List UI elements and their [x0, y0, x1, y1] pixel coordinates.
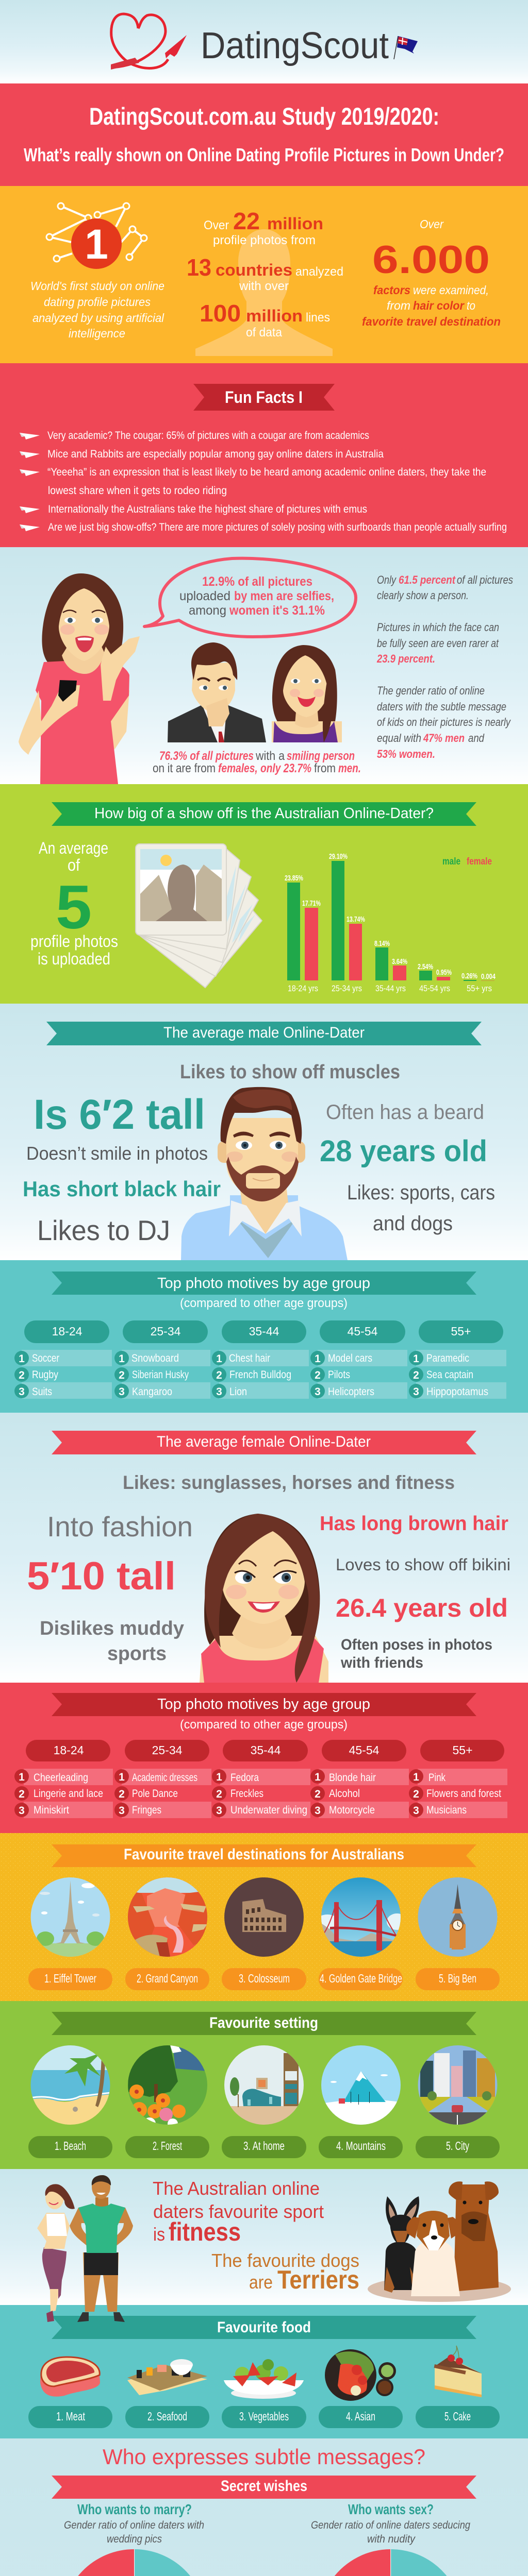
text: world's first study: intelligence: [69, 327, 125, 340]
text: picture statistics: 47% men: [423, 732, 465, 744]
text: picture statistics: The gender ratio of online: [377, 684, 485, 697]
speech bubble: 12.9% of all pictures: [202, 574, 312, 589]
table: female ranked motives: Blonde hair: [329, 1772, 376, 1784]
table: female ranked motives: Academic dresses: [132, 1772, 197, 1784]
ribbon heading: show off: [52, 802, 476, 826]
table: male ranked motives: Model cars: [328, 1352, 372, 1364]
text: female traits: Often poses in photos: [341, 1636, 492, 1653]
panel: average female online dater: [0, 1413, 528, 1683]
icon: DatingScout heart and paper plane: [111, 14, 187, 70]
text: factors examined: Over: [420, 217, 444, 231]
text: average five photos: profile photos: [30, 932, 118, 951]
ribbon heading: top motives male: [52, 1272, 476, 1295]
list: fun facts I: lowest share when it gets to rodeo riding: [48, 485, 227, 497]
illustration: woman with phone: [19, 573, 140, 784]
text: male traits: Likes to show off muscles: [180, 1061, 400, 1083]
destination labels: 1. Eiffel Tower: [44, 1972, 96, 1985]
bar chart: photos by age and gender: 13.74%: [346, 915, 365, 924]
table: male ranked motives: 2: [413, 1369, 419, 1381]
list: fun facts I: [20, 430, 507, 533]
table: female ranked motives: 3: [413, 1805, 419, 1817]
text: who wants sex: with nudity: [367, 2533, 416, 2545]
text: male traits: Doesn’t smile in photos: [26, 1143, 208, 1164]
bar chart: photos by age and gender: female: [467, 856, 492, 867]
icon: Big Ben: [418, 1877, 497, 1957]
ribbon heading: top motives female: Top photo motives by age group: [157, 1696, 370, 1713]
setting labels: 5. City: [446, 2139, 469, 2153]
table: male ranked motives: 2: [119, 1369, 125, 1381]
ribbon heading: average female: [52, 1431, 476, 1454]
table: male ranked motives: 1: [413, 1353, 419, 1365]
text: male traits: 28 years old: [320, 1134, 487, 1168]
bar chart: photos by age and gender: male: [442, 856, 460, 867]
destination labels: 2. Grand Canyon: [137, 1972, 198, 1985]
ribbon heading: Fun Facts I: [193, 384, 335, 411]
text: male traits: Likes: sports, cars: [347, 1181, 495, 1204]
text: female traits: Has long brown hair: [320, 1513, 508, 1535]
text: who wants sex: Gender ratio of online daters seducing: [311, 2519, 470, 2531]
table: female ranked motives: Cheerleading: [34, 1772, 88, 1784]
text: average five photos: An average: [39, 839, 108, 857]
speech bubble: women it's 31.1%: [229, 603, 325, 618]
table: female ranked motives: 1: [119, 1771, 125, 1783]
table: female ranked motives: 2: [19, 1788, 25, 1800]
subheading: (compared to other age groups): [180, 1296, 348, 1310]
text: favourite sport: [153, 2178, 324, 2246]
table: female ranked motives: Musicians: [426, 1804, 467, 1816]
list: fun facts I: “Yeeeha” is an expression that is least likely to be heard among academic online daters, they take the: [47, 466, 486, 478]
icon: sushi: [127, 2359, 207, 2395]
text: favourite dogs: [211, 2250, 359, 2294]
text: female traits: sports: [107, 1643, 167, 1665]
bar chart: photos by age and gender: 2.54%: [418, 962, 433, 971]
table: female ranked motives: Flowers and forest: [426, 1788, 501, 1800]
table: male ranked motives: Rugby: [32, 1369, 58, 1381]
panel: study key figures: [0, 186, 528, 363]
text: world's first study: World's first study on online: [30, 279, 164, 293]
table: female ranked motives: 3: [119, 1805, 125, 1817]
table: male ranked motives: 1: [315, 1353, 321, 1365]
table: male ranked motives: Lion: [229, 1386, 247, 1398]
ribbon heading: Fun Facts I: Fun Facts I: [225, 388, 303, 406]
table: male ranked motives: 1: [119, 1353, 125, 1365]
text: world's first study: [30, 279, 164, 340]
table: male ranked motives: Soccer: [32, 1352, 59, 1364]
text: data volume: million: [246, 307, 303, 325]
illustration: smiling woman: [272, 645, 342, 742]
table: male ranked motives: Suits: [32, 1386, 52, 1398]
text: data volume: 100: [200, 300, 241, 327]
bar chart: photos by age and gender: 55+ yrs: [467, 984, 492, 993]
text: data volume: [187, 208, 343, 340]
ribbon heading: travel: [52, 1844, 476, 1867]
text: data volume: profile photos from: [213, 233, 316, 247]
text: favourite sport: fitness: [169, 2217, 241, 2246]
age pills: 18-24: [52, 1325, 82, 1338]
donut chart: wedding pics: [62, 2549, 206, 2576]
panel: fun facts I: [0, 363, 528, 547]
table: female ranked motives: 2: [119, 1788, 125, 1800]
destination labels: 3. Colosseum: [239, 1972, 290, 1985]
caption: smiling statistics: [153, 749, 361, 775]
list: fun facts I: Internationally the Australians take the highest share of pictures with emus: [48, 503, 367, 515]
table: male ranked motives: 2: [19, 1369, 25, 1381]
logo wordmark: DatingScout: [201, 25, 389, 66]
food labels: 4. Asian: [346, 2410, 375, 2423]
setting labels: 4. Mountains: [336, 2139, 386, 2153]
text: average five photos: of: [68, 856, 80, 874]
text: favourite dogs: The favourite dogs: [211, 2250, 359, 2271]
bar chart: photos by age and gender: 8.14%: [374, 939, 390, 948]
icon: beach: [30, 2045, 111, 2125]
ribbon heading: food: [52, 2316, 476, 2339]
table: male ranked motives: 2: [216, 1369, 222, 1381]
text: picture statistics: clearly show a person.: [377, 589, 469, 602]
bar chart: photos by age and gender: 0.95%: [436, 968, 452, 977]
table: male ranked motives: 1: [216, 1353, 222, 1365]
text: picture statistics: of all pictures: [457, 573, 513, 586]
age pills: 45-54: [348, 1325, 378, 1338]
caption: smiling statistics: from: [314, 761, 336, 775]
destination labels: 5. Big Ben: [439, 1972, 476, 1985]
table: female ranked motives: Fedora: [230, 1772, 259, 1784]
table: female ranked motives: [14, 1769, 507, 1818]
table: male ranked motives: Helicopters: [328, 1386, 374, 1398]
illustration: three terriers: [368, 2181, 511, 2302]
table: female ranked motives: Pink: [428, 1772, 446, 1784]
age pills: 18-24: [54, 1743, 84, 1757]
table: male ranked motives: 3: [119, 1386, 125, 1398]
caption: smiling statistics: on it are from: [153, 761, 216, 775]
icon: Eiffel Tower: [30, 1877, 111, 1959]
table: male ranked motives: Hippopotamus: [426, 1386, 488, 1398]
age pills: [24, 1320, 503, 1343]
bar chart: photos by age and gender: 18-24 yrs: [288, 984, 318, 993]
panel: favourite setting: [0, 2001, 528, 2169]
table: male ranked motives: 2: [315, 1369, 321, 1381]
panel: average male online dater: [0, 1004, 528, 1260]
table: female ranked motives: Lingerie and lace: [34, 1788, 103, 1800]
panel: male photo motives: [0, 1260, 528, 1413]
text: female traits: Into fashion: [47, 1511, 193, 1543]
icon: city: [418, 2045, 498, 2125]
text: factors examined: were examined,: [413, 283, 489, 297]
text: average five photos: 5: [56, 873, 92, 942]
text: female traits: Loves to show off bikini: [336, 1555, 510, 1574]
bar chart: photos by age and gender: 23.85%: [285, 874, 303, 883]
text: picture statistics: Pictures in which the face can: [377, 621, 499, 634]
table: male ranked motives: French Bulldog: [229, 1369, 291, 1381]
text: factors examined: [362, 217, 501, 328]
text: average five photos: [30, 839, 118, 968]
table: female ranked motives: Alcohol: [329, 1788, 360, 1800]
food labels: 1. Meat: [56, 2410, 85, 2423]
ribbon heading: top motives female: [52, 1693, 476, 1716]
age pills: 25-34: [151, 1325, 181, 1338]
text: factors examined: factors: [373, 283, 410, 297]
caption: smiling statistics: females, only 23.7%: [218, 761, 311, 775]
setting labels: 2. Forest: [153, 2139, 182, 2153]
bar chart: photos by age and gender: 17.71%: [302, 899, 321, 908]
text: world's first study: dating profile pictures: [44, 295, 151, 309]
bar chart: photos by age and gender: 0.26%: [461, 972, 477, 980]
text: male traits: Likes to DJ: [37, 1214, 170, 1246]
text: world's first study: analyzed by using artificial: [32, 311, 164, 325]
text: picture statistics: [376, 573, 513, 760]
text: female traits: 5′10 tall: [27, 1554, 176, 1598]
icon: cake: [434, 2346, 482, 2397]
table: male ranked motives: Pilots: [328, 1369, 350, 1381]
age pills: [26, 1740, 504, 1761]
text: picture statistics: 53% women.: [377, 748, 435, 760]
bar chart: photos by age and gender: [285, 852, 496, 993]
age pills: 35-44: [249, 1325, 279, 1338]
text: picture statistics: and: [468, 732, 485, 744]
text: favourite sport: The Australian online: [153, 2178, 320, 2199]
icon: mountains: [321, 2045, 401, 2125]
panel: who expresses subtle messages: [0, 2438, 528, 2576]
table: male ranked motives: [14, 1350, 506, 1399]
text: picture statistics: 61.5 percent: [399, 573, 456, 586]
text: factors examined: to: [467, 299, 475, 312]
ribbon heading: setting: [52, 2012, 476, 2035]
panel: favourite sport and dogs: [0, 2169, 528, 2305]
text: picture statistics: Only: [377, 573, 397, 586]
ribbon heading: average male: [46, 1022, 482, 1045]
table: male ranked motives: Siberian Husky: [132, 1369, 189, 1381]
donut chart: nudity: [319, 2549, 463, 2576]
panel: selfies and smiles: [0, 547, 528, 784]
ribbon heading: secret wishes: Secret wishes: [221, 2478, 307, 2495]
list: fun facts I: Mice and Rabbits are especially popular among gay online daters in Australia: [47, 448, 384, 460]
icon: number one network: [46, 203, 147, 269]
text: who wants to marry: Who wants to marry?: [77, 2501, 192, 2517]
age pills: 25-34: [152, 1743, 183, 1757]
panel: favourite travel destinations: [0, 1833, 528, 2001]
table: female ranked motives: 3: [315, 1805, 321, 1817]
setting labels: [28, 2136, 500, 2158]
table: female ranked motives: 2: [413, 1788, 419, 1800]
illustration: jogging couple: [37, 2175, 133, 2322]
table: male ranked motives: Snowboard: [131, 1352, 179, 1364]
text: male traits: and dogs: [373, 1212, 453, 1235]
table: male ranked motives: 3: [315, 1386, 321, 1398]
list: fun facts I: Very academic? The cougar: 65% of pictures with a cougar are from academics: [47, 430, 369, 442]
text: female traits: 26.4 years old: [336, 1594, 508, 1622]
table: male ranked motives: 3: [413, 1386, 419, 1398]
subheading: (compared to other age groups): [180, 1718, 348, 1732]
text: factors examined: favorite travel destination: [362, 315, 501, 328]
setting labels: 3. At home: [243, 2139, 285, 2153]
ribbon heading: average male: The average male Online-Dater: [163, 1024, 365, 1041]
panel: favourite food: [0, 2305, 528, 2438]
bar chart: photos by age and gender: 45-54 yrs: [419, 984, 450, 993]
text: male traits: [23, 1061, 495, 1246]
table: female ranked motives: 3: [19, 1805, 25, 1817]
bar chart: photos by age and gender: 3.64%: [392, 957, 407, 966]
text: factors examined: from: [387, 299, 410, 312]
text: female traits: [27, 1472, 510, 1671]
table: female ranked motives: 2: [315, 1788, 321, 1800]
illustration: thinking man: [168, 642, 266, 742]
text: male traits: Has short black hair: [23, 1177, 221, 1201]
text: female traits: Dislikes muddy: [40, 1618, 184, 1639]
speech bubble: among: [189, 603, 226, 618]
panel: header with logo: [0, 0, 528, 83]
illustration: fan of photos: [136, 844, 262, 988]
icon: Golden Gate Bridge: [321, 1877, 401, 1957]
panel: female photo motives: [0, 1683, 528, 1833]
ribbon heading: travel: Favourite travel destinations for Australians: [124, 1846, 404, 1863]
table: female ranked motives: Motorcycle: [329, 1804, 375, 1816]
food labels: 2. Seafood: [147, 2410, 187, 2423]
caption: smiling statistics: smiling person: [287, 749, 355, 763]
table: female ranked motives: 1: [315, 1771, 321, 1783]
speech bubble: [144, 558, 356, 637]
text: female traits: Likes: sunglasses, horses and fitness: [123, 1472, 455, 1493]
icon: meat: [40, 2357, 100, 2397]
text: data volume: lines: [306, 311, 330, 325]
table: female ranked motives: Pole Dance: [132, 1788, 178, 1800]
destination labels: 4. Golden Gate Bridge: [320, 1972, 402, 1985]
text: female traits: with friends: [340, 1654, 423, 1671]
icon: salad: [224, 2359, 304, 2399]
caption: smiling statistics: men.: [338, 761, 361, 775]
text: male traits: Is 6′2 tall: [34, 1091, 205, 1138]
panel: title band: [0, 83, 528, 186]
table: female ranked motives: 1: [216, 1771, 222, 1783]
bar chart: photos by age and gender: 25-34 yrs: [332, 984, 362, 993]
text: factors examined: 6.000: [372, 238, 490, 282]
illustration: long haired woman: [200, 1514, 328, 1683]
age pills: 45-54: [349, 1743, 380, 1757]
icon: Australian flag: [394, 36, 418, 59]
table: female ranked motives: 1: [19, 1771, 25, 1783]
icon: profile silhouette: [195, 229, 333, 356]
table: female ranked motives: 1: [413, 1771, 419, 1783]
ribbon heading: top motives male: Top photo motives by age group: [157, 1275, 370, 1292]
icon: Asian dish: [325, 2349, 396, 2401]
text: picture statistics: equal with: [377, 732, 421, 744]
text: data volume: of data: [246, 326, 283, 340]
destination labels: [28, 1968, 500, 1990]
table: male ranked motives: 3: [216, 1386, 222, 1398]
icon: number one network: 1: [85, 221, 108, 268]
text: who wants sex: [311, 2501, 470, 2545]
text: average five photos: is uploaded: [38, 950, 110, 968]
text: who wants sex: Who wants sex?: [348, 2501, 434, 2517]
bar chart: photos by age and gender: 29.10%: [329, 852, 348, 861]
text: picture statistics: be fully seen are even rarer at: [377, 637, 499, 650]
text: favourite sport: is: [153, 2224, 165, 2245]
text: data volume: Over: [204, 218, 229, 232]
table: female ranked motives: 3: [216, 1805, 222, 1817]
table: female ranked motives: Fringes: [132, 1804, 161, 1816]
age pills: 55+: [451, 1325, 471, 1338]
text: data volume: analyzed: [295, 265, 343, 279]
text: data volume: countries: [216, 261, 292, 279]
illustration: bearded man: [181, 1087, 348, 1260]
ribbon heading: secret wishes: [52, 2476, 476, 2499]
text: male traits: Often has a beard: [326, 1101, 484, 1124]
table: male ranked motives: Sea captain: [426, 1369, 473, 1381]
ribbon heading: food: Favourite food: [217, 2319, 311, 2336]
table: male ranked motives: Paramedic: [426, 1352, 469, 1364]
heading: Who expresses subtle messages?: [103, 2445, 425, 2469]
caption: smiling statistics: 76.3% of all pictures: [159, 749, 254, 763]
age pills: 35-44: [251, 1743, 281, 1757]
table: male ranked motives: 3: [19, 1386, 25, 1398]
text: data volume: million: [267, 214, 323, 233]
text: favourite dogs: Terriers: [277, 2265, 359, 2294]
icon: home interior: [224, 2045, 304, 2127]
text: factors examined: hair color: [413, 299, 465, 312]
speech bubble: uploaded: [179, 589, 230, 603]
text: data volume: 13: [187, 254, 211, 281]
table: male ranked motives: Kangaroo: [132, 1386, 172, 1398]
text: data volume: 22: [233, 208, 260, 234]
text: favourite dogs: are: [249, 2272, 273, 2293]
setting labels: 1. Beach: [55, 2139, 86, 2153]
panel: how big of a show off: [0, 784, 528, 1004]
text: who wants to marry: [64, 2501, 204, 2545]
ribbon heading: average female: The average female Online-Dater: [157, 1433, 371, 1450]
table: male ranked motives: 1: [19, 1353, 25, 1365]
age pills: 55+: [452, 1743, 473, 1757]
bar chart: photos by age and gender: 0.004: [481, 972, 496, 981]
text: picture statistics: 23.9 percent.: [376, 652, 435, 665]
table: female ranked motives: Freckles: [230, 1788, 263, 1800]
table: male ranked motives: Chest hair: [229, 1352, 270, 1364]
text: who wants to marry: wedding pics: [107, 2533, 162, 2545]
icon: Grand Canyon: [128, 1877, 207, 1957]
icon: forest: [128, 2045, 207, 2130]
caption: smiling statistics: with a: [255, 749, 285, 763]
ribbon heading: setting: Favourite setting: [209, 2014, 318, 2031]
icon: Colosseum: [224, 1877, 304, 1957]
table: female ranked motives: 2: [216, 1788, 222, 1800]
table: female ranked motives: Underwater diving: [230, 1804, 307, 1816]
bar chart: photos by age and gender: 35-44 yrs: [375, 984, 406, 993]
food labels: 5. Cake: [444, 2410, 471, 2423]
speech bubble: by men are selfies,: [234, 589, 334, 603]
text: data volume: with over: [239, 279, 289, 293]
ribbon heading: show off: How big of a show off is the Australian Online-Dater?: [94, 805, 434, 822]
text: favourite sport: daters favourite sport: [153, 2201, 324, 2222]
food labels: [28, 2406, 500, 2428]
food labels: 3. Vegetables: [239, 2410, 289, 2423]
table: female ranked motives: Miniskirt: [34, 1804, 69, 1816]
title: DatingScout.com.au Study 2019/2020:: [89, 103, 439, 130]
text: who wants to marry: Gender ratio of online daters with: [64, 2519, 204, 2531]
